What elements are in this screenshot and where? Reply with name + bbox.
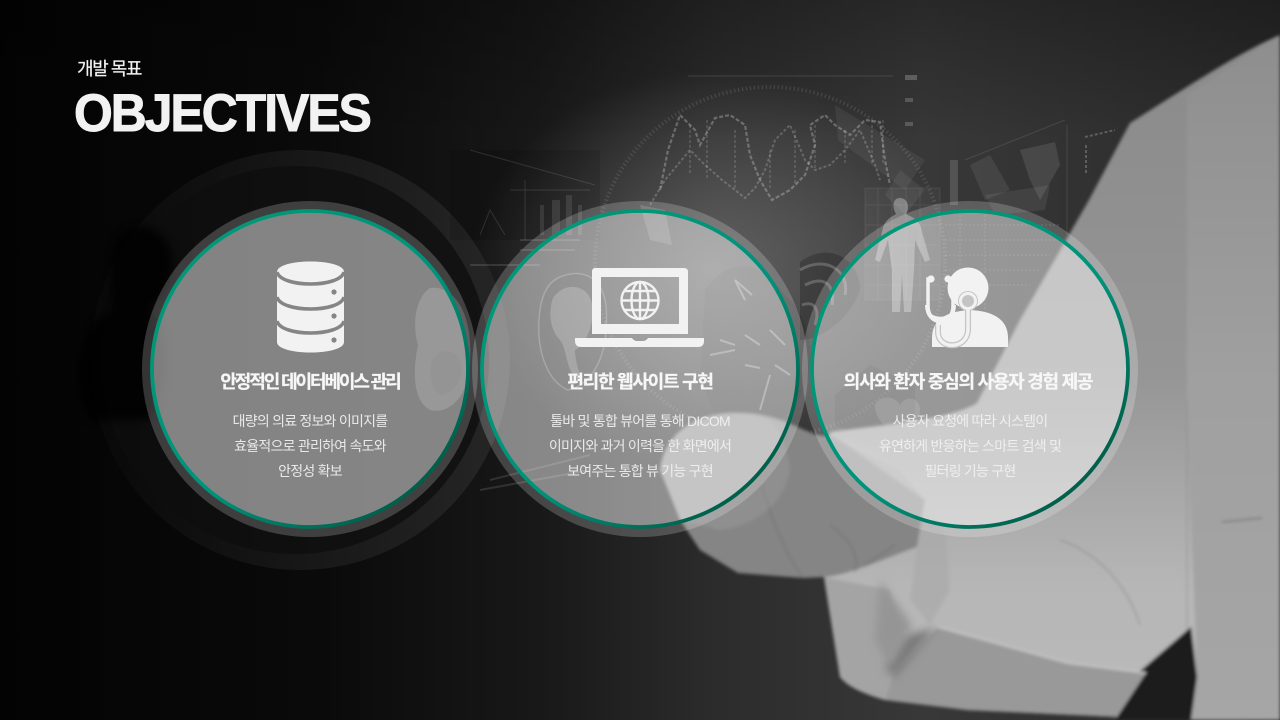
description: 이미지와 과거 이력을 한 화면에서 <box>549 438 731 454</box>
description: 유연하게 반응하는 스마트 검색 및 <box>879 438 1061 454</box>
description: 툴바 및 통합 뷰어를 통해 DICOM <box>550 413 730 429</box>
heading: 편리한 웹사이트 구현 <box>567 372 713 392</box>
anatomical figure and grid <box>835 188 1060 440</box>
description: 사용자 요청에 따라 시스템이 <box>893 413 1047 429</box>
circle badge <box>142 201 478 537</box>
description: 대량의 의료 정보와 이미지를 <box>233 413 387 429</box>
doctor coat, sleeve and hand <box>660 35 1280 720</box>
icon: doctor with stethoscope <box>925 268 1008 348</box>
description: 보여주는 통합 뷰 기능 구현 <box>567 463 713 479</box>
icon: database <box>277 262 344 352</box>
circle badge <box>472 201 1117 537</box>
description <box>879 413 1061 479</box>
heading: 의사와 환자 중심의 사용자 경험 제공 <box>844 372 1092 392</box>
description <box>233 413 388 479</box>
heading: 안정적인 데이터베이스 관리 <box>220 372 400 392</box>
panel: convenient website <box>472 201 1117 537</box>
description: 필터링 기능 구현 <box>924 463 1016 479</box>
title: OBJECTIVES <box>74 84 370 143</box>
HUD chart panel <box>450 75 917 240</box>
description <box>549 413 731 479</box>
panel: database management <box>142 201 478 537</box>
protein data panel <box>950 120 1115 235</box>
icon: laptop with globe <box>575 268 704 347</box>
description: 효율적으로 관리하여 속도와 <box>234 438 386 454</box>
brain scan images <box>415 205 860 490</box>
description: 안정성 확보 <box>278 463 342 479</box>
subtitle: 개발 목표 <box>77 59 141 79</box>
circle badge <box>802 201 1138 537</box>
DNA helix and dial <box>595 87 945 437</box>
panel: user experience <box>802 201 1138 537</box>
MRI scanner and patient silhouette <box>78 150 510 570</box>
